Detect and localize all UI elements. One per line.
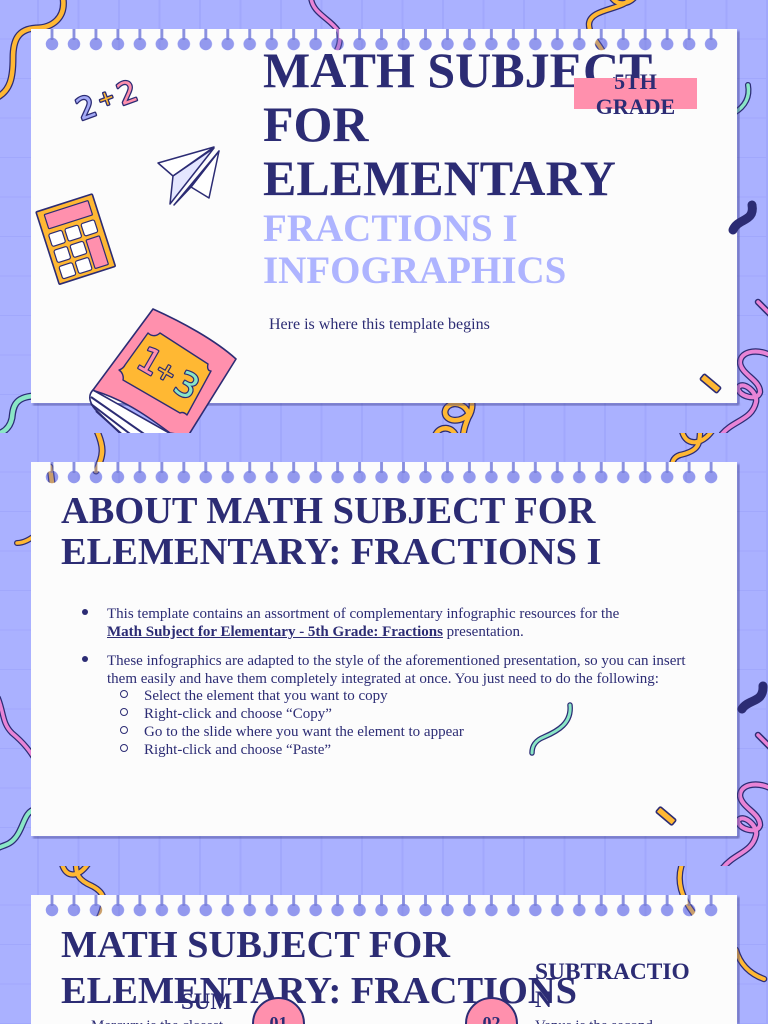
icon: math book: +: [150, 355, 182, 389]
subtitle: FRACTIONS I: [263, 207, 518, 250]
icon: calculator: [36, 194, 115, 284]
sub-steps: Right-click and choose “Copy”: [144, 706, 332, 722]
slide 1: [0, 0, 768, 440]
grade label: GRADE: [596, 94, 675, 119]
icon: paper plane: [158, 147, 219, 205]
heading: fractions: ELEMENTARY: FRACTIONS: [61, 970, 577, 1012]
icon: math book: [90, 309, 236, 440]
sub-steps: [120, 688, 464, 758]
navy squiggle: [742, 686, 763, 709]
label: sum: SUM: [181, 989, 232, 1014]
paper sheet 3: [31, 895, 740, 1024]
heading: about: ABOUT MATH SUBJECT FOR: [61, 490, 595, 532]
ribbons behind paper, slide 2: [0, 431, 768, 869]
heading: about: [61, 490, 601, 573]
bullet one: This template contains an assortment of complementary infographic resources for the: [107, 606, 619, 622]
icon: 2+2: +: [94, 84, 118, 112]
paper sheet 1: [31, 29, 740, 406]
grade badge: [574, 78, 697, 109]
bullet two: These infographics are adapted to the style of the aforementioned presentation, so you can insert: [107, 653, 686, 669]
yellow confetti bar: [656, 807, 676, 825]
heading: fractions: MATH SUBJECT FOR: [61, 924, 450, 966]
mint ribbon: [532, 705, 570, 753]
sub-steps: Right-click and choose “Paste”: [144, 742, 331, 758]
icon: math book: 1: [130, 339, 169, 385]
heading: about: ELEMENTARY: FRACTIONS I: [61, 531, 601, 573]
icon: 2+2: 2: [113, 74, 142, 113]
label: subtraction: N: [535, 987, 552, 1013]
icon: 2+2: [74, 80, 138, 122]
bullet one: Math Subject for Elementary - 5th Grade: Fractions presentation.: [107, 624, 524, 640]
bullet two: them easily and have them completely integrated at once. You just need to do the following:: [107, 671, 659, 687]
subtitle: INFOGRAPHICS: [263, 249, 566, 292]
sub-steps: Select the element that you want to copy: [144, 688, 388, 704]
navy squiggle: [733, 205, 752, 230]
grade label: [596, 69, 675, 119]
ribbons behind paper, slide 3: [62, 864, 764, 979]
subtitle: [263, 207, 566, 292]
bullet two: [82, 653, 686, 687]
ribbons behind paper, slide 1: [0, 0, 768, 436]
title: [263, 42, 652, 206]
sub-steps: Go to the slide where you want the element to appear: [144, 724, 464, 740]
heading: fractions: [61, 924, 577, 1012]
slide 2: [0, 431, 768, 869]
title: FOR: [263, 96, 369, 152]
grade label: 5TH: [614, 69, 657, 94]
about bullet list: [82, 606, 686, 758]
slide 3: [0, 864, 768, 1024]
icon: 2+2: 2: [72, 89, 101, 128]
icon: math book: 3: [167, 363, 206, 409]
bullet one: [82, 606, 619, 640]
label: subtraction: [535, 959, 690, 1013]
title: MATH SUBJECT: [263, 42, 652, 98]
intro line: Here is where this template begins: [269, 316, 490, 333]
yellow confetti bar: [700, 374, 721, 393]
label: subtraction: SUBTRACTIO: [535, 959, 690, 985]
title: ELEMENTARY: [263, 150, 616, 206]
paper sheet 2: [31, 462, 740, 838]
